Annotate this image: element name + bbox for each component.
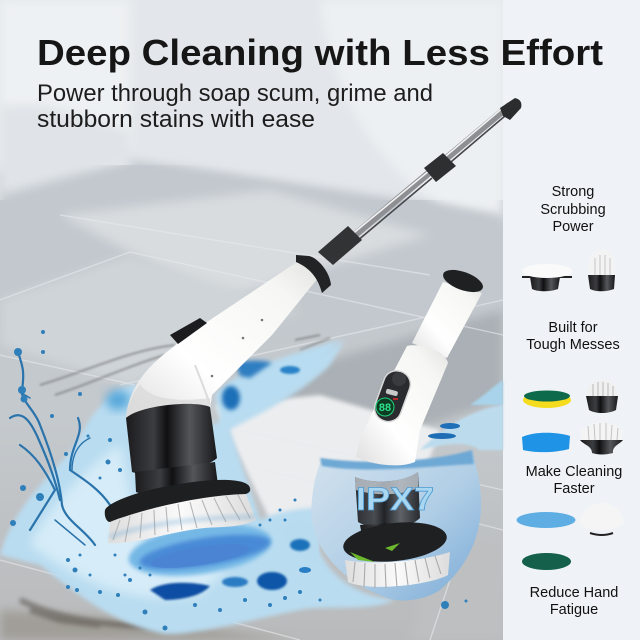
label: make cleaning faster: Make Cleaning: [526, 464, 622, 480]
attachment: dark green scouring pad: [522, 553, 571, 570]
label: built for tough messes: Tough Messes: [526, 337, 620, 353]
attachment: yellow and green sponge pad: [523, 390, 571, 408]
sidebar panel: [503, 0, 640, 640]
label: built for tough messes: [526, 320, 620, 353]
waterproof brush: submerged collar and disc: [341, 472, 450, 588]
foam and water on floor: [0, 340, 503, 634]
title: Deep Cleaning with Less Effort: [37, 32, 603, 73]
subtitle: Power through soap scum, grime and: [37, 80, 433, 107]
label: make cleaning faster: Faster: [553, 481, 595, 497]
waterproof brush: water bowl: [311, 450, 481, 601]
label: reduce hand fatigue: [530, 585, 618, 618]
water splash left: [10, 352, 110, 545]
waterproof brush: control panel with display: [371, 367, 414, 425]
attachment: white dome brush: [579, 503, 624, 535]
label: built for tough messes: Built for: [548, 320, 598, 336]
label: reduce hand fatigue: Fatigue: [550, 602, 598, 618]
main brush: bristles: [108, 494, 256, 543]
water droplets and bubbles: [10, 330, 468, 630]
label: strong scrubbing power: Scrubbing: [540, 202, 606, 218]
IPX7 water text: IPX7: [356, 481, 434, 517]
main brush: white body and elbow: [126, 255, 331, 418]
label: make cleaning faster: [526, 464, 622, 497]
subtitle: stubborn stains with ease: [37, 106, 315, 133]
attachment: blue microfiber pad: [516, 512, 576, 528]
subtitle: [37, 80, 433, 133]
waterproof brush: white handle and body: [356, 265, 486, 465]
label: strong scrubbing power: Power: [552, 219, 594, 235]
attachment: white pad: [522, 264, 572, 291]
attachment: black bristle brush: [586, 380, 618, 413]
waterproof brush: control panel with display: 88: [379, 402, 391, 414]
label: strong scrubbing power: [540, 184, 606, 235]
main brush: black collar and disc: [105, 404, 250, 522]
attachment: tall white brush: [588, 249, 615, 291]
attachment: blue sponge pad: [522, 433, 570, 452]
label: strong scrubbing power: Strong: [552, 184, 594, 200]
attachment: wide white brush: [580, 423, 623, 454]
main brush: telescopic handle: [318, 98, 521, 265]
label: reduce hand fatigue: Reduce Hand: [530, 585, 618, 601]
